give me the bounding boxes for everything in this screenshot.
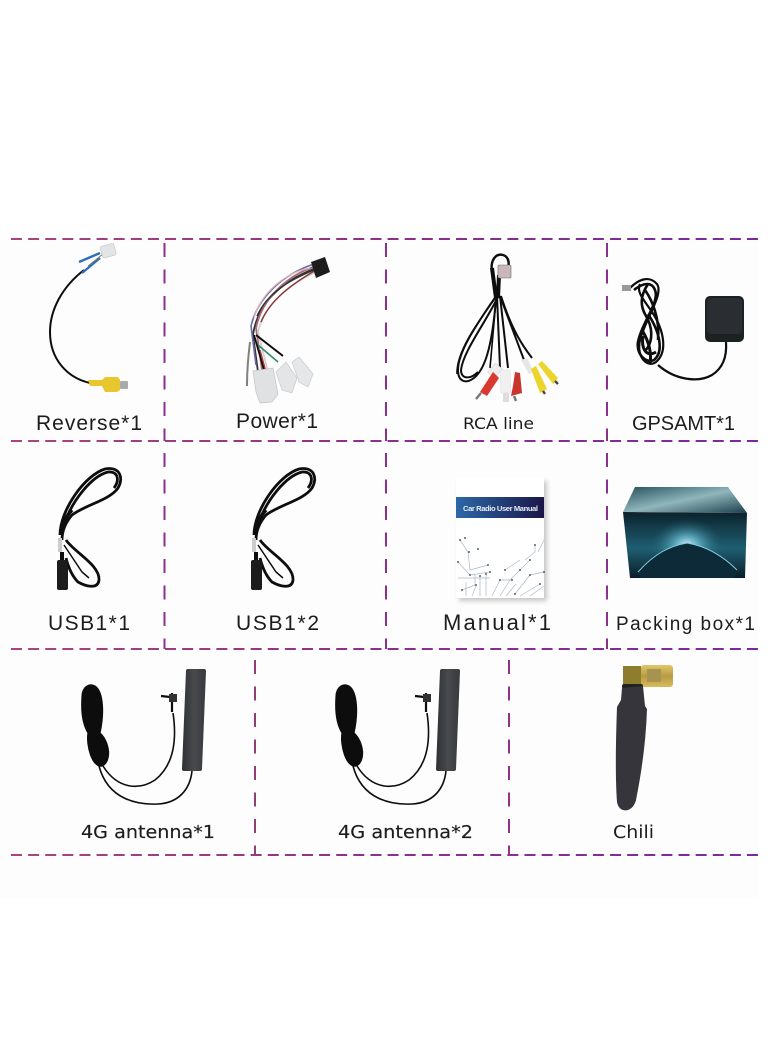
icon: GPS antenna <box>622 279 744 379</box>
panel: 4G antenna 2 <box>336 669 473 843</box>
label: USB1*2: USB1*2 <box>236 612 319 635</box>
label: 4G antenna*1: 4G antenna*1 <box>81 822 215 843</box>
icon: chili antenna <box>616 665 673 810</box>
icon: USB cable <box>57 469 121 590</box>
label: USB1*1: USB1*1 <box>48 612 130 635</box>
panel: manual <box>443 477 551 635</box>
icon: user manual <box>456 477 547 601</box>
panel: RCA line <box>457 255 558 433</box>
icon: user manual: Car Radio User Manual <box>463 504 538 513</box>
panel: reverse cable <box>36 243 142 435</box>
icon: packing box <box>623 487 747 578</box>
icon: RCA cable <box>457 255 558 402</box>
panel: power harness <box>236 257 330 433</box>
panel: chili antenna <box>613 665 673 843</box>
label: 4G antenna*2: 4G antenna*2 <box>338 822 473 843</box>
label: Manual*1: Manual*1 <box>443 610 551 635</box>
icon: 4G antenna <box>82 669 206 804</box>
label: Packing box*1: Packing box*1 <box>616 614 755 635</box>
panel: USB 1 <box>48 469 130 635</box>
label: Chili: Chili <box>613 822 654 843</box>
panel: 4G antenna 1 <box>81 669 215 843</box>
label: Power*1: Power*1 <box>236 410 318 433</box>
icon: reverse cable <box>50 243 128 392</box>
panel: USB 2 <box>236 469 319 635</box>
icon: power harness <box>247 257 330 403</box>
label: GPSAMT*1: GPSAMT*1 <box>632 413 735 435</box>
label: Reverse*1: Reverse*1 <box>36 412 142 435</box>
panel: packing box <box>616 487 755 635</box>
panel: GPS antenna <box>622 279 744 435</box>
icon: USB cable <box>251 469 315 590</box>
label: RCA line: RCA line <box>463 414 534 433</box>
icon: 4G antenna <box>336 669 460 804</box>
